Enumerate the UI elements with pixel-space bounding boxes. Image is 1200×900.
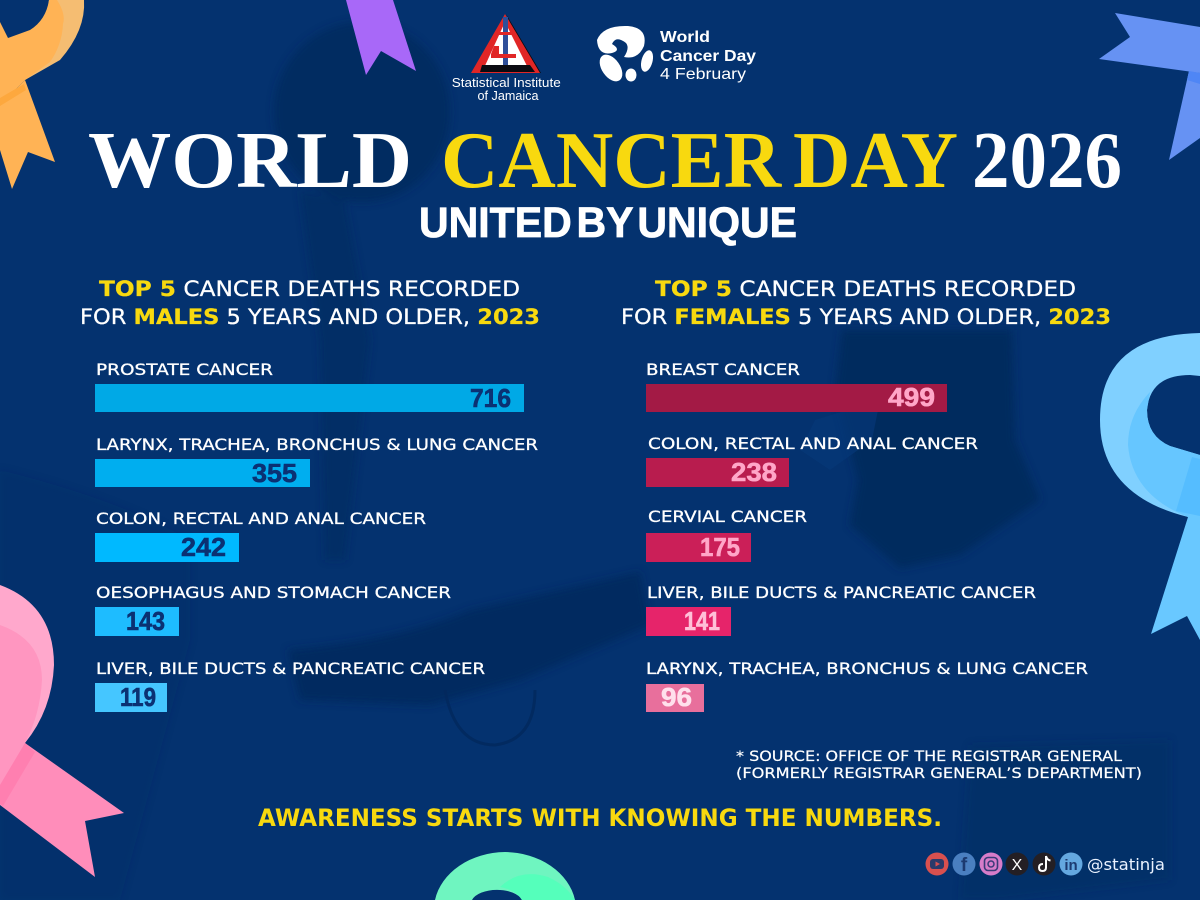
bar: larynx: 355 <box>252 458 297 488</box>
icon: facebook <box>952 852 976 876</box>
bar: cervical: CERVIAL CANCER <box>648 507 807 526</box>
panel: females <box>621 277 1111 712</box>
subtitle: UNITED BY UNIQUE <box>419 199 797 247</box>
bar: colon: 242 <box>181 532 226 562</box>
bar: breast <box>646 360 947 412</box>
panel: males <box>80 277 540 712</box>
icon: instagram <box>980 852 1002 876</box>
ribbon: periwinkle <box>1099 13 1200 160</box>
icon: world cancer day mark <box>595 26 655 85</box>
bar: liver <box>95 659 485 712</box>
source note: (FORMERLY REGISTRAR GENERAL’S DEPARTMENT) <box>736 766 1142 782</box>
bar: larynx: LARYNX, TRACHEA, BRONCHUS & LUNG CANCER <box>96 435 538 454</box>
ribbon: light blue <box>1100 333 1200 640</box>
logo text: Cancer Day <box>660 48 756 65</box>
bar: liver: LIVER, BILE DUCTS & PANCREATIC CANCER <box>96 659 485 678</box>
handle: @statinja <box>1087 855 1165 874</box>
bar: breast: BREAST CANCER <box>646 360 800 379</box>
bar: prostate: PROSTATE CANCER <box>96 360 273 379</box>
bar: prostate: 716 <box>470 383 511 413</box>
logo text: World <box>660 29 710 46</box>
logo: Statistical Institute of Jamaica <box>452 14 564 103</box>
icon: youtube <box>926 852 948 876</box>
logo: World Cancer Day <box>595 26 760 85</box>
bar: prostate <box>95 360 524 413</box>
bar: cervical <box>646 507 807 562</box>
icon: tiktok <box>1032 852 1056 876</box>
icon: x: X <box>1012 857 1023 874</box>
bar: oesophagus: OESOPHAGUS AND STOMACH CANCER <box>96 583 451 602</box>
ribbon: pink <box>0 585 124 877</box>
bar: colon <box>95 509 426 562</box>
bar: cervical: 175 <box>700 532 740 562</box>
heading: males: TOP 5 CANCER DEATHS RECORDED <box>99 277 487 301</box>
bar: colon: COLON, RECTAL AND ANAL CANCER <box>96 509 426 528</box>
heading: females: TOP 5 CANCER DEATHS RECORDED <box>655 277 1043 301</box>
icon: linkedin: in <box>1064 857 1078 874</box>
title: CANCER DAY <box>441 117 958 205</box>
title <box>88 117 1122 205</box>
ribbon: purple <box>346 0 416 75</box>
bar: breast: 499 <box>888 382 935 412</box>
bar: liver: 141 <box>684 606 720 636</box>
ribbon: orange <box>0 0 84 189</box>
bar: oesophagus <box>95 583 451 636</box>
title: WORLD <box>88 117 412 205</box>
bar: colon: 238 <box>731 457 777 487</box>
source note: * SOURCE: OFFICE OF THE REGISTRAR GENERAL <box>736 749 1122 765</box>
logo text: 4 February <box>660 66 746 83</box>
tagline: AWARENESS STARTS WITH KNOWING THE NUMBERS. <box>258 804 942 832</box>
icon: statin triangle <box>471 14 541 73</box>
ribbon: green <box>435 852 575 900</box>
bar: liver <box>646 583 1036 636</box>
logo text: Statistical Institute <box>452 76 561 90</box>
bar: larynx: 96 <box>661 682 692 712</box>
icon: x <box>1006 852 1028 876</box>
heading: females: FOR FEMALES 5 YEARS AND OLDER, 2023 <box>621 305 1107 329</box>
icon: linkedin <box>1060 852 1082 876</box>
bar: colon: COLON, RECTAL AND ANAL CANCER <box>648 434 978 453</box>
bar: colon <box>646 434 978 487</box>
bar: larynx: LARYNX, TRACHEA, BRONCHUS & LUNG CANCER <box>646 659 1088 678</box>
icon: facebook: f <box>961 855 968 876</box>
heading: males: FOR MALES 5 YEARS AND OLDER, 2023 <box>80 305 536 329</box>
bar: larynx <box>95 435 538 488</box>
bar: liver: LIVER, BILE DUCTS & PANCREATIC CANCER <box>647 583 1036 602</box>
bar: oesophagus: 143 <box>126 606 165 636</box>
social media row <box>926 852 1165 876</box>
bar: larynx <box>646 659 1088 712</box>
title: 2026 <box>972 117 1122 205</box>
bar: liver: 119 <box>120 682 156 712</box>
logo text: of Jamaica <box>478 89 539 103</box>
